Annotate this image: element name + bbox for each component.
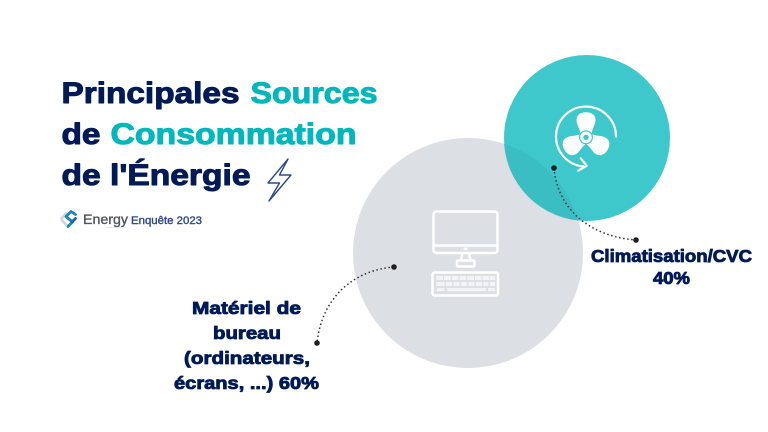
label: air conditioning 40%: Climatisation/CVC <box>591 246 752 266</box>
title <box>62 77 378 192</box>
label: office equipment 60%: bureau <box>213 323 281 343</box>
label: air conditioning 40% <box>591 246 752 288</box>
title: de <box>62 118 100 151</box>
title: Consommation <box>110 118 356 151</box>
panel: office equipment circle <box>353 138 583 368</box>
panel: air conditioning circle <box>504 55 670 221</box>
logo and survey label: Energy <box>83 211 128 227</box>
arrow: air conditioning leader line <box>551 165 639 243</box>
label: office equipment 60% <box>174 298 319 393</box>
title: Sources <box>250 77 378 110</box>
label: air conditioning 40%: 40% <box>653 268 690 288</box>
logo and survey label: Enquête 2023 <box>131 215 202 227</box>
title: Principales <box>62 77 240 110</box>
title: de l'Énergie <box>62 158 250 192</box>
icon: rotating fan <box>556 107 616 171</box>
arrow: office equipment leader line <box>314 264 397 346</box>
label: office equipment 60%: Matériel de <box>192 298 301 318</box>
icon: logo mark <box>62 212 76 226</box>
panel: circle overlap <box>504 144 578 220</box>
logo and survey label <box>62 211 202 228</box>
icon: lightning bolt <box>268 159 291 201</box>
label: office equipment 60%: (ordinateurs, <box>184 348 310 368</box>
icon: desktop computer and keyboard <box>432 212 498 296</box>
label: office equipment 60%: écrans, ...) 60% <box>174 373 319 393</box>
